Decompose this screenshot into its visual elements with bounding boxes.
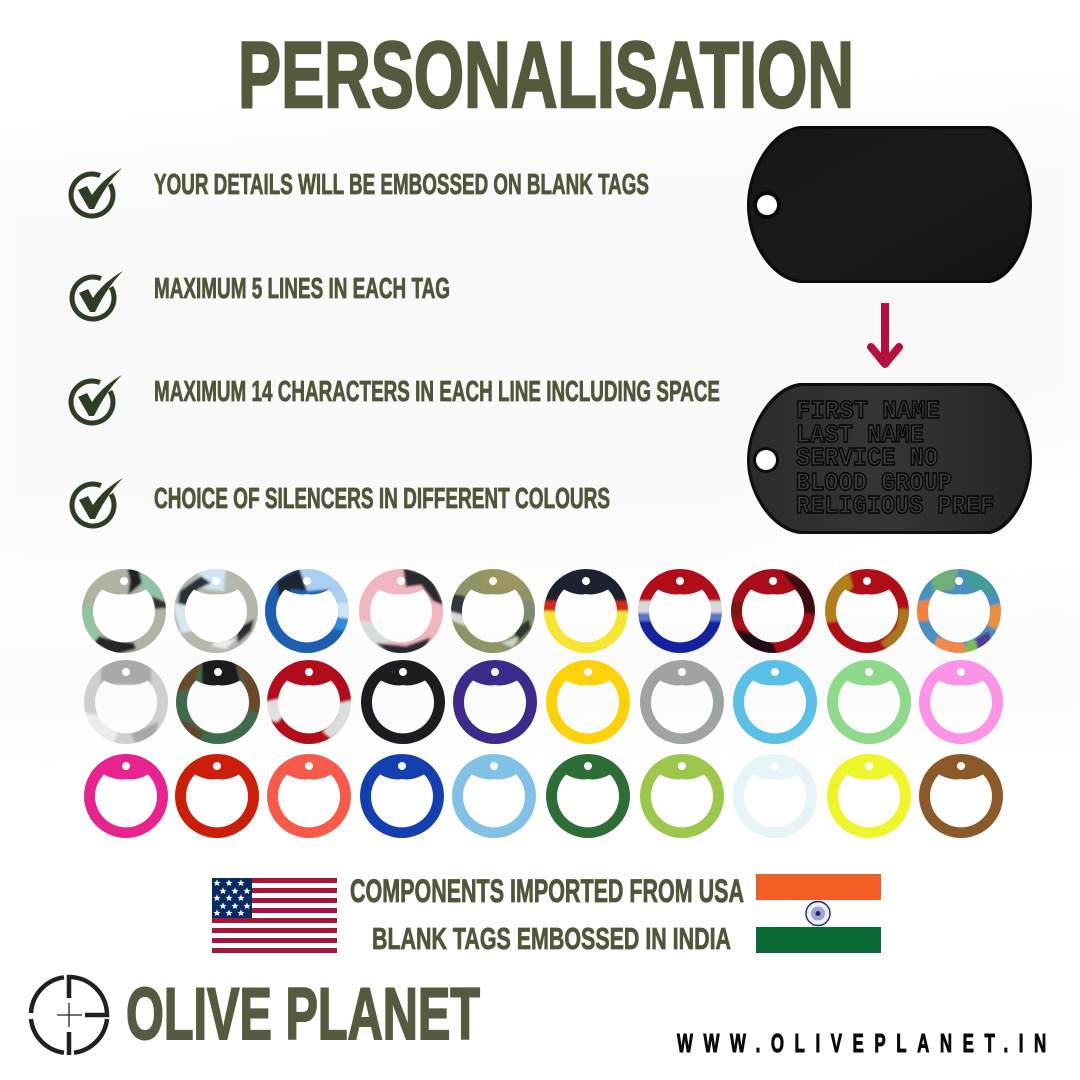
text: components imported: COMPONENTS IMPORTED FROM USA	[350, 873, 744, 909]
row 2: grey camo and solid rings	[82, 658, 1005, 746]
logo: crosshair emblem	[31, 977, 107, 1055]
item 2	[72, 271, 450, 319]
icon: check mark	[71, 375, 122, 423]
embossed text: SERVICE NO	[796, 443, 938, 473]
embossed text	[796, 396, 994, 521]
item 4	[72, 478, 610, 526]
website url: WWW.OLIVEPLANET.IN	[677, 1028, 1046, 1058]
icon: check mark	[71, 168, 122, 216]
icon: check mark	[72, 478, 123, 526]
checklist	[71, 168, 720, 526]
embossed text: LAST NAME	[796, 420, 924, 450]
logo wordmark: OLIVE PLANET	[126, 974, 480, 1055]
blank black dog tag	[747, 126, 1032, 283]
text: silencer colours: CHOICE OF SILENCERS IN DIFFERENT COLOURS	[154, 483, 610, 515]
text: embossed in India: BLANK TAGS EMBOSSED IN INDIA	[372, 921, 731, 956]
embossed text: RELIGIOUS PREF	[796, 491, 994, 521]
row 3: solid rings	[82, 752, 1005, 840]
text: max characters: MAXIMUM 14 CHARACTERS IN EACH LINE INCLUDING SPACE	[154, 376, 720, 408]
silencer rings	[80, 567, 1005, 840]
text: embossed details: YOUR DETAILS WILL BE EMBOSSED ON BLANK TAGS	[154, 169, 649, 201]
embossed text: FIRST NAME	[796, 396, 940, 426]
text: max lines: MAXIMUM 5 LINES IN EACH TAG	[154, 273, 450, 305]
item 3	[71, 375, 720, 423]
arrow	[871, 303, 899, 364]
icon: check mark	[72, 271, 123, 319]
row 1: camo and multicolour rings	[80, 567, 1003, 655]
embossed text: BLOOD GROUP	[796, 468, 952, 498]
icon: USA flag	[212, 878, 337, 953]
item 1	[71, 168, 649, 216]
embossed dog tag	[747, 383, 1032, 534]
icon: India flag	[756, 874, 881, 953]
